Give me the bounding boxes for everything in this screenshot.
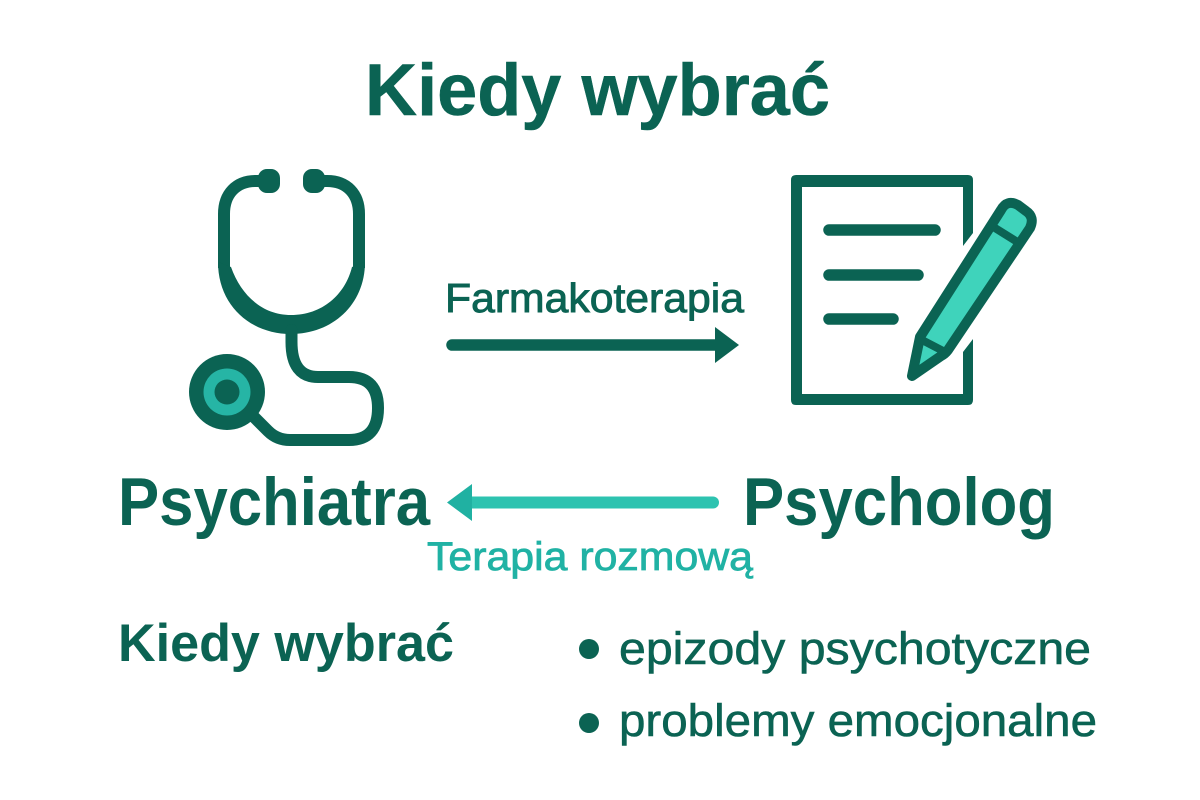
- arrow: left: [447, 484, 713, 521]
- icon: stethoscope: [189, 169, 378, 440]
- item 2: problemy emocjonalne: [619, 695, 1097, 746]
- item 1: epizody psychotyczne: [619, 623, 1091, 674]
- label: Psychiatra: Psychiatra: [118, 464, 431, 540]
- bullet 2: [579, 713, 599, 733]
- bullet 1: [579, 639, 599, 659]
- icon: document with pencil: [791, 175, 1032, 405]
- label: Psycholog: Psycholog: [743, 464, 1055, 540]
- list: [579, 623, 1097, 746]
- label: Terapia rozmowa: Terapia rozmową: [427, 535, 754, 579]
- label: Farmakoterapia: Farmakoterapia: [445, 275, 744, 321]
- subheading: Kiedy wybrać: [118, 614, 454, 673]
- arrow: right: [452, 327, 739, 363]
- title: Kiedy wybrać: [365, 50, 830, 131]
